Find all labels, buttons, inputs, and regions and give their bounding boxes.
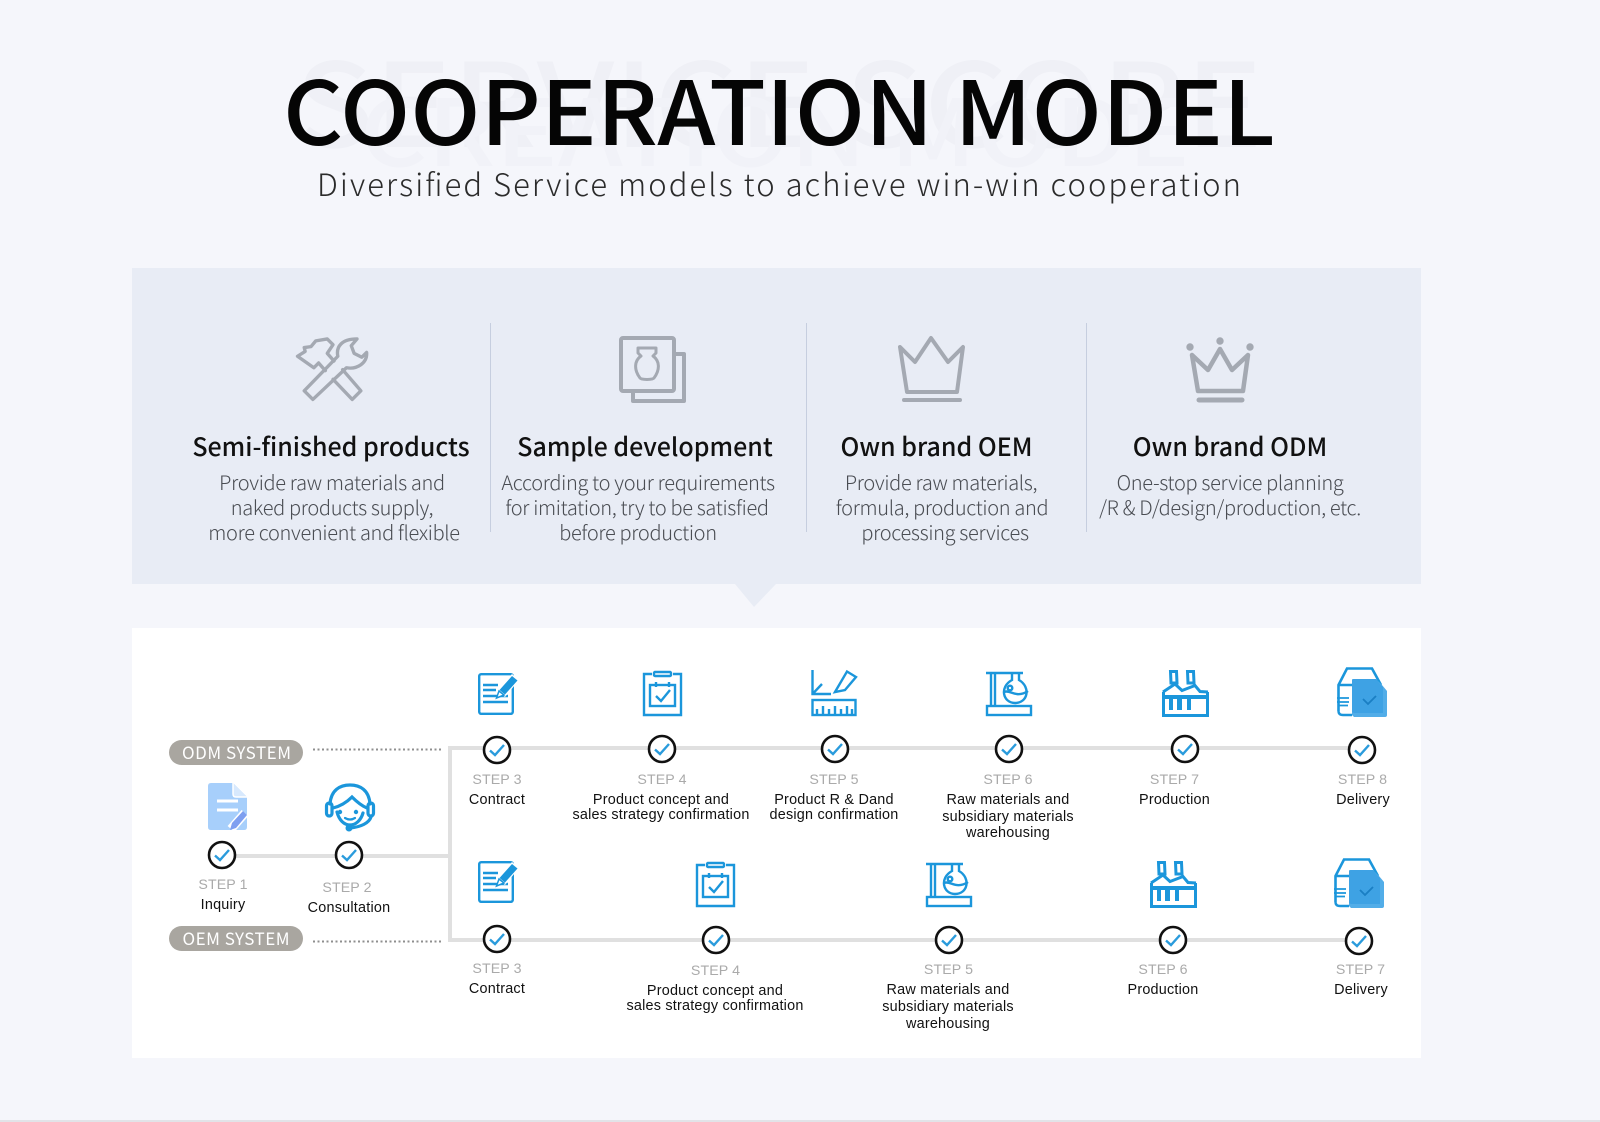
card: own brand OEM	[836, 428, 1048, 546]
card: semi-finished products: Provide raw materials and	[219, 467, 445, 496]
icon: crown with jewels	[1186, 337, 1254, 400]
ODM step 7: production: Production	[1139, 792, 1210, 808]
ODM step 8: delivery	[1336, 668, 1390, 808]
OEM step 7: delivery	[1334, 860, 1388, 998]
OEM step 3: contract: STEP 3	[472, 961, 522, 977]
ODM step 5: product R and D	[770, 670, 898, 823]
ghost background heading: CREATION MODE	[360, 60, 1190, 193]
card: own brand OEM: Own brand OEM	[840, 428, 1033, 464]
ODM step 4: product concept: sales strategy confirmation	[572, 807, 750, 823]
card: semi-finished products: more convenient and flexible	[208, 517, 460, 546]
card: own brand ODM: /R & D/design/production, etc.	[1099, 492, 1361, 521]
card: own brand ODM	[1099, 428, 1361, 521]
card: own brand OEM: formula, production and	[836, 492, 1048, 521]
ODM step 6: raw materials	[942, 672, 1074, 841]
ODM step 5: product R and D: Product R & Dand	[774, 792, 894, 808]
OEM step 7: delivery: STEP 7	[1336, 962, 1385, 978]
ODM step 5: product R and D: design confirmation	[770, 807, 898, 823]
panel: process flow	[132, 628, 1421, 1058]
card: sample development: for imitation, try to be satisfied	[505, 492, 769, 521]
ODM step 3: contract	[469, 674, 525, 808]
OEM step 6: production: Production	[1128, 982, 1198, 998]
OEM step 4: product concept: STEP 4	[691, 963, 740, 979]
OEM step 6: production	[1128, 862, 1198, 998]
step 1: inquiry: STEP 1	[198, 877, 248, 893]
card: own brand ODM: One-stop service planning	[1117, 467, 1344, 496]
ghost background heading: SERVICE SCOPE	[295, 13, 1263, 181]
card: semi-finished products: Semi-finished products	[192, 428, 470, 464]
ODM step 7: production: STEP 7	[1150, 772, 1199, 788]
OEM step 4: product concept: sales strategy confirmation	[626, 998, 804, 1014]
ODM step 3: contract: Contract	[469, 792, 525, 808]
ODM step 8: delivery: Delivery	[1336, 792, 1390, 808]
icon: crown	[900, 338, 963, 400]
card: semi-finished products	[192, 428, 470, 546]
OEM step 4: product concept: Product concept and	[647, 983, 783, 999]
card: sample development: before production	[559, 517, 717, 546]
OEM system label: OEM SYSTEM	[182, 925, 290, 950]
ODM step 6: raw materials: Raw materials and	[947, 792, 1069, 808]
card: sample development: Sample development	[517, 428, 773, 464]
ODM step 8: delivery: STEP 8	[1338, 772, 1387, 788]
step 1: inquiry	[198, 783, 248, 913]
title: COOPERATION MODEL	[283, 44, 1275, 171]
card: own brand ODM: Own brand ODM	[1133, 428, 1327, 464]
OEM step 6: production: STEP 6	[1138, 962, 1188, 978]
step 1: inquiry: Inquiry	[201, 897, 246, 913]
step 2: consultation	[308, 785, 390, 916]
ODM step 6: raw materials: warehousing	[965, 825, 1050, 841]
step 2: consultation: Consultation	[308, 900, 390, 916]
ODM system label: ODM SYSTEM	[182, 739, 291, 764]
card: semi-finished products: naked products supply,	[231, 492, 433, 521]
card: own brand OEM: processing services	[861, 517, 1029, 546]
OEM step 5: raw materials: Raw materials and	[887, 982, 1009, 998]
ODM step 4: product concept: STEP 4	[637, 772, 687, 788]
OEM step 3: contract	[469, 862, 525, 997]
OEM step 7: delivery: Delivery	[1334, 982, 1388, 998]
card: sample development: According to your requirements	[501, 467, 775, 496]
panel: service models	[132, 268, 1421, 607]
card: sample development	[501, 428, 775, 546]
ODM step 5: product R and D: STEP 5	[809, 772, 859, 788]
icon: hammer and wrench	[298, 339, 367, 399]
OEM step 5: raw materials: warehousing	[905, 1016, 990, 1032]
dotted leaders	[313, 750, 441, 942]
ODM step 3: contract: STEP 3	[472, 772, 522, 788]
ODM step 4: product concept	[572, 672, 750, 823]
ODM step 4: product concept: Product concept and	[593, 792, 729, 808]
ODM step 6: raw materials: subsidiary materials	[942, 809, 1074, 825]
ODM step 7: production	[1139, 672, 1210, 808]
card: own brand OEM: Provide raw materials,	[845, 467, 1037, 496]
icon: sample vase	[621, 338, 684, 401]
OEM step 3: contract: Contract	[469, 981, 525, 997]
subtitle: Diversified Service models to achieve win-win cooperation	[317, 160, 1241, 205]
timeline connector lines	[222, 748, 1362, 940]
step 2: consultation: STEP 2	[322, 880, 372, 896]
OEM step 5: raw materials: subsidiary materials	[882, 999, 1014, 1015]
ODM step 6: raw materials: STEP 6	[983, 772, 1033, 788]
OEM step 4: product concept	[626, 863, 804, 1014]
OEM step 5: raw materials: STEP 5	[924, 962, 973, 978]
OEM step 5: raw materials	[882, 863, 1014, 1032]
